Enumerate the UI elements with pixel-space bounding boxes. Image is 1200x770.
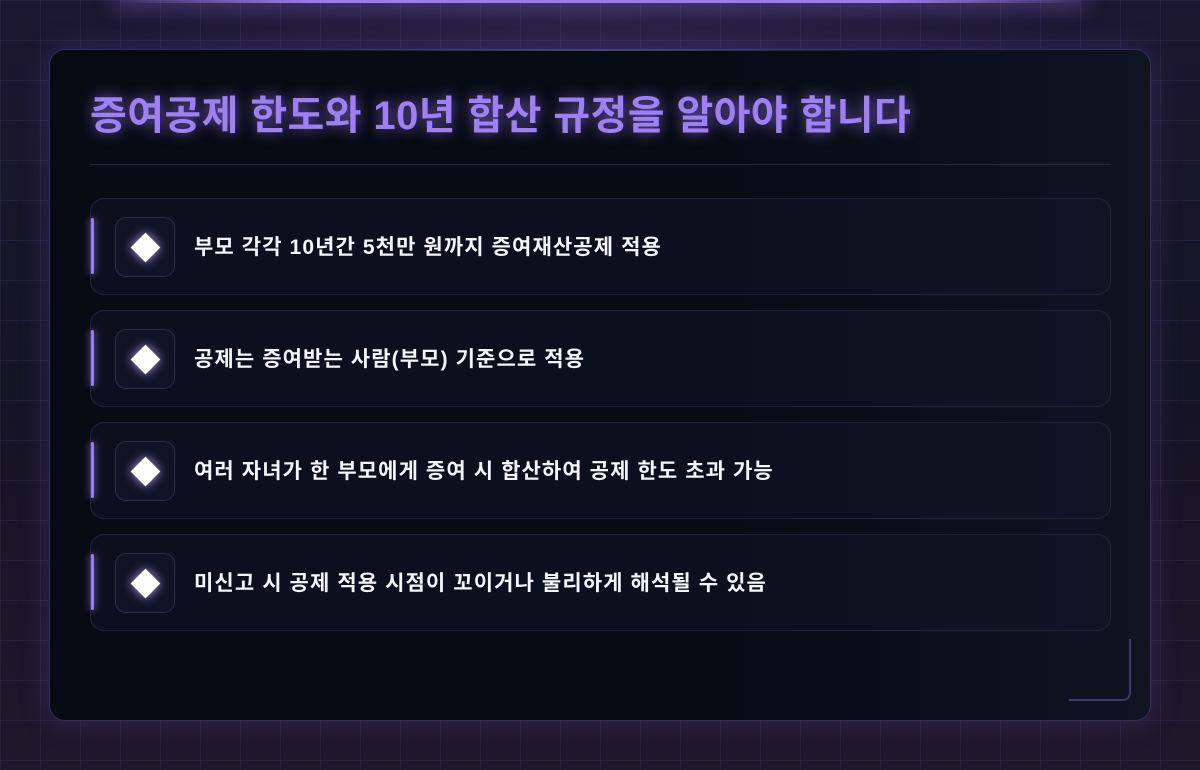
icon: diamond xyxy=(115,441,175,501)
text 3: 여러 자녀가 한 부모에게 증여 시 합산하여 공제 한도 초과 가능 xyxy=(194,460,774,483)
corner bracket xyxy=(1069,639,1131,701)
text 1: 부모 각각 10년간 5천만 원까지 증여재산공제 적용 xyxy=(194,236,662,259)
item 4 xyxy=(90,534,1111,631)
icon: diamond xyxy=(115,217,175,277)
text 2: 공제는 증여받는 사람(부모) 기준으로 적용 xyxy=(194,348,585,371)
item 1 xyxy=(90,198,1111,295)
text 4: 미신고 시 공제 적용 시점이 꼬이거나 불리하게 해석될 수 있음 xyxy=(194,572,767,595)
icon: diamond xyxy=(115,553,175,613)
item 3 xyxy=(90,422,1111,519)
icon: diamond xyxy=(115,329,175,389)
title: 증여공제 한도와 10년 합산 규정을 알아야 합니다 xyxy=(90,94,911,138)
item 2 xyxy=(90,310,1111,407)
